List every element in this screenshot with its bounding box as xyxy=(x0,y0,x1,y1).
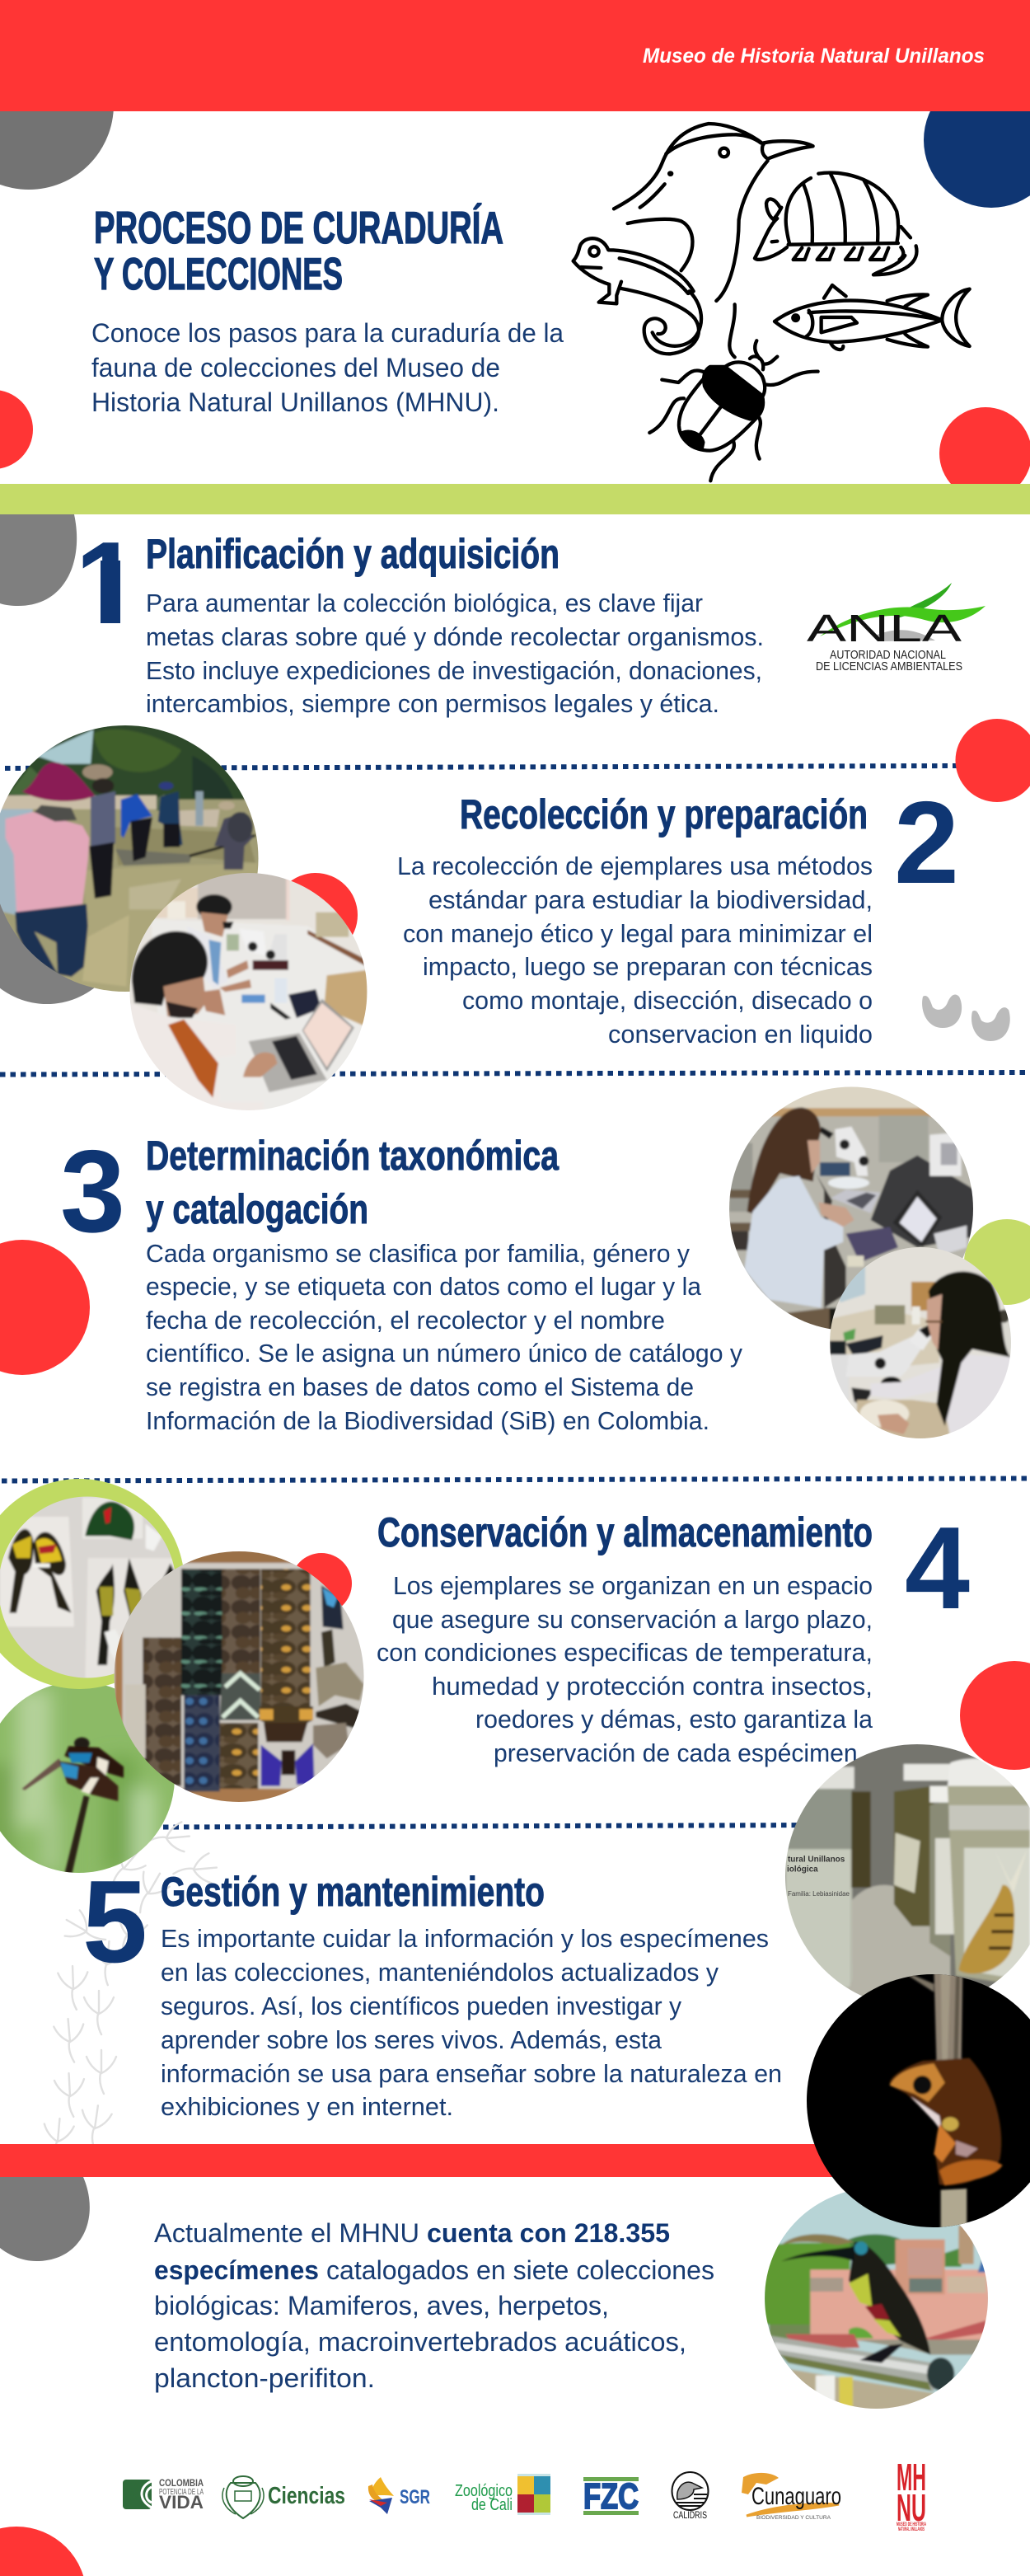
main title xyxy=(94,202,503,299)
bird tracks decoration xyxy=(41,1822,218,2163)
icon: chameleon xyxy=(574,238,701,354)
header band xyxy=(0,0,1030,111)
photo: toucan on rail xyxy=(765,2192,988,2409)
closing statistics text: Actualmente el MHNU xyxy=(154,2218,419,2248)
logo: MHNU: MUSEO DE HISTORIA xyxy=(897,2522,926,2527)
body 5: Es importante cuidar la información y los especímenes xyxy=(161,1925,769,1953)
body 2 xyxy=(397,852,873,1049)
closing statistics text: plancton-perifiton. xyxy=(154,2363,375,2393)
body 4: roedores y démas, esto garantiza la xyxy=(475,1706,873,1734)
lower grey and red decorative circles xyxy=(0,2177,90,2576)
dotted divider 2 xyxy=(0,1072,1030,1075)
body 3: científico. Se le asigna un número único de catálogo y xyxy=(146,1340,743,1368)
body 1: intercambios, siempre con permisos legales y ética. xyxy=(146,690,719,718)
body 1: Esto incluye expediciones de investigación, donaciones, xyxy=(146,657,762,685)
icon: armadillo xyxy=(755,172,916,274)
main title: PROCESO DE CURADURÍA xyxy=(94,202,503,253)
logo: Ciencias: Ciencias xyxy=(268,2483,345,2509)
section 3 decorative circles xyxy=(0,1219,1030,1375)
intro text: Conoce los pasos para la curaduría de la xyxy=(91,318,564,348)
main title: Y COLECCIONES xyxy=(94,248,343,299)
logo: Calidris: CALIDRIS xyxy=(673,2509,707,2521)
closing statistics text: biológicas: Mamiferos, aves, herpetos, xyxy=(154,2291,609,2320)
photo: specimen jars xyxy=(783,1742,1030,2017)
logo: Zoológico de Cali: de Cali xyxy=(471,2496,513,2514)
logo: ANLA xyxy=(807,583,986,673)
body 4: con condiciones especificas de temperatura, xyxy=(377,1639,873,1667)
body 1: Para aumentar la colección biológica, es clave fijar xyxy=(146,589,703,617)
body 5: información se usa para enseñar sobre la naturaleza en xyxy=(161,2060,782,2088)
logo: ANLA: ANLA xyxy=(807,607,962,650)
logo: MHNU: NU xyxy=(897,2486,926,2529)
body 5 xyxy=(161,1925,782,2121)
logo: FZC: FZC xyxy=(583,2476,639,2517)
body 5: exhibiciones y en internet. xyxy=(161,2093,453,2121)
closing statistics text: entomología, macroinvertebrados acuáticos, xyxy=(154,2327,686,2357)
intro text: Historia Natural Unillanos (MHNU). xyxy=(91,387,499,417)
section 3: taxonomic determination xyxy=(60,1126,743,1435)
decorative circles: header area xyxy=(0,20,1030,500)
body 5: aprender sobre los seres vivos. Además, esta xyxy=(161,2026,662,2054)
body 3: se registra en bases de datos como el Sistema de xyxy=(146,1373,694,1401)
body 3: especie, y se etiqueta con datos como el lugar y la xyxy=(146,1273,701,1301)
heading 5: Gestión y mantenimiento xyxy=(161,1869,545,1915)
body 1: metas claras sobre qué y dónde recolectar organismos. xyxy=(146,623,764,651)
body 4: Los ejemplares se organizan en un espacio xyxy=(393,1572,873,1600)
logo: Cunaguaro: Cunaguaro xyxy=(751,2483,841,2510)
body 5: en las colecciones, manteniéndolos actualizados y xyxy=(161,1959,719,1987)
logo: Cunaguaro xyxy=(742,2473,841,2521)
body 3: Información de la Biodiversidad (SiB) en Colombia. xyxy=(146,1407,709,1435)
logo: ANLA: AUTORIDAD NACIONAL xyxy=(830,648,946,662)
body 2: como montaje, disección, disecado o xyxy=(462,987,873,1015)
footer logos xyxy=(123,2456,926,2532)
body 3 xyxy=(146,1240,743,1435)
logo: Cunaguaro: BIODIVERSIDAD Y CULTURA xyxy=(756,2516,831,2521)
photo: researcher at laptops xyxy=(725,1080,978,1338)
section 2 decorative circles xyxy=(0,719,1030,1004)
closing statistics text xyxy=(154,2218,714,2393)
heading 3: Determinación taxonómica xyxy=(146,1133,559,1179)
photo: specimen jars: tural Unillanos xyxy=(788,1855,845,1864)
header museum name: Museo de Historia Natural Unillanos xyxy=(643,45,985,68)
closing statistics text: especímenes xyxy=(154,2255,319,2285)
logo: Ciencias xyxy=(222,2476,345,2518)
body 5: seguros. Así, los científicos pueden investigar y xyxy=(161,1992,682,2020)
body 2: La recolección de ejemplares usa métodos xyxy=(397,852,873,880)
intro text xyxy=(91,318,564,417)
footprints icon xyxy=(922,995,1010,1041)
photo: dragonfly xyxy=(0,1679,179,1877)
photo: specimen jars: Familia: Lebiasinidae xyxy=(788,1890,850,1898)
body 3: Cada organismo se clasifica por familia, género y xyxy=(146,1240,691,1268)
icon: bird xyxy=(614,124,813,301)
logo: SGR xyxy=(368,2477,430,2514)
icon: beetle xyxy=(649,304,818,481)
logo: Zoológico de Cali xyxy=(455,2474,550,2515)
green band xyxy=(0,484,1030,514)
photo: specimen jars: iológica xyxy=(787,1865,818,1875)
body 1 xyxy=(146,589,764,718)
logo: MHNU: NATURAL UNILLANOS xyxy=(898,2527,925,2532)
body 2: conservacion en liquido xyxy=(608,1021,873,1049)
number 4: 4 xyxy=(905,1503,970,1634)
number 1: 1 xyxy=(75,518,140,649)
logo: ANLA: DE LICENCIAS AMBIENTALES xyxy=(816,659,962,673)
section 1: planning and acquisition xyxy=(82,537,986,717)
dotted divider 3 xyxy=(2,1479,1030,1480)
heading 3 xyxy=(146,1133,559,1232)
photo: butterfly drawer xyxy=(110,1550,371,1805)
number 2: 2 xyxy=(894,777,959,908)
photo: researcher at microscope xyxy=(826,1245,1016,1443)
heading 3: y catalogación xyxy=(146,1186,368,1232)
logo: MHNU: MH xyxy=(897,2456,926,2499)
section 1 decorative grey circle xyxy=(0,514,77,606)
dotted divider 1 xyxy=(5,766,960,768)
body 2: estándar para estudiar la biodiversidad, xyxy=(428,886,873,914)
intro text: fauna de colecciones del Museo de xyxy=(91,353,500,382)
section 5: management and maintenance xyxy=(82,1856,782,2121)
closing statistics text: catalogados en siete colecciones xyxy=(326,2255,714,2285)
logo: Colombia Potencia de la Vida: COLOMBIA xyxy=(159,2477,204,2489)
red band lower xyxy=(0,2144,906,2177)
number 5: 5 xyxy=(82,1856,147,1987)
photo: field collection in river xyxy=(0,717,266,995)
dotted divider 4 xyxy=(163,1825,824,1827)
logo: SGR: SGR xyxy=(400,2486,430,2508)
logo: Colombia Potencia de la Vida: POTENCIA DE LA xyxy=(159,2488,204,2497)
heading 1: Planificación y adquisición xyxy=(146,531,559,577)
body 4: preservación de cada espécimen. xyxy=(494,1739,864,1767)
animal line illustrations xyxy=(574,124,970,481)
logo: MHNU xyxy=(897,2456,926,2532)
icon: fish xyxy=(775,285,970,350)
section 4: conservation and storage xyxy=(377,1503,970,1767)
body 2: con manejo ético y legal para minimizar el xyxy=(403,920,873,948)
photo: frog on branch xyxy=(799,1968,1030,2234)
logo: Colombia Potencia de la Vida xyxy=(123,2477,204,2513)
logo: Calidris xyxy=(672,2472,709,2521)
body 4: humedad y protección contra insectos, xyxy=(432,1673,873,1701)
body 4 xyxy=(377,1572,873,1767)
body 4: que asegure su conservación a largo plazo, xyxy=(392,1606,873,1634)
closing statistics text: cuenta con 218.355 xyxy=(427,2218,670,2248)
heading 2: Recolección y preparación xyxy=(460,791,868,838)
heading 4: Conservación y almacenamiento xyxy=(377,1509,873,1555)
photo: two researchers in laboratory xyxy=(126,871,373,1115)
photo: mounted bird specimens with green ring xyxy=(0,1479,185,1689)
body 3: fecha de recolección, el recolector y el nombre xyxy=(146,1307,665,1335)
section 4 decorative circles xyxy=(291,1553,1030,1770)
body 2: impacto, luego se preparan con técnicas xyxy=(423,953,873,981)
section 2: collection and preparation xyxy=(397,777,959,1049)
logo: Zoológico de Cali: Zoológico xyxy=(455,2482,513,2500)
logo: Colombia Potencia de la Vida: VIDA xyxy=(159,2492,204,2513)
number 1 xyxy=(82,542,120,623)
number 3: 3 xyxy=(60,1126,125,1257)
